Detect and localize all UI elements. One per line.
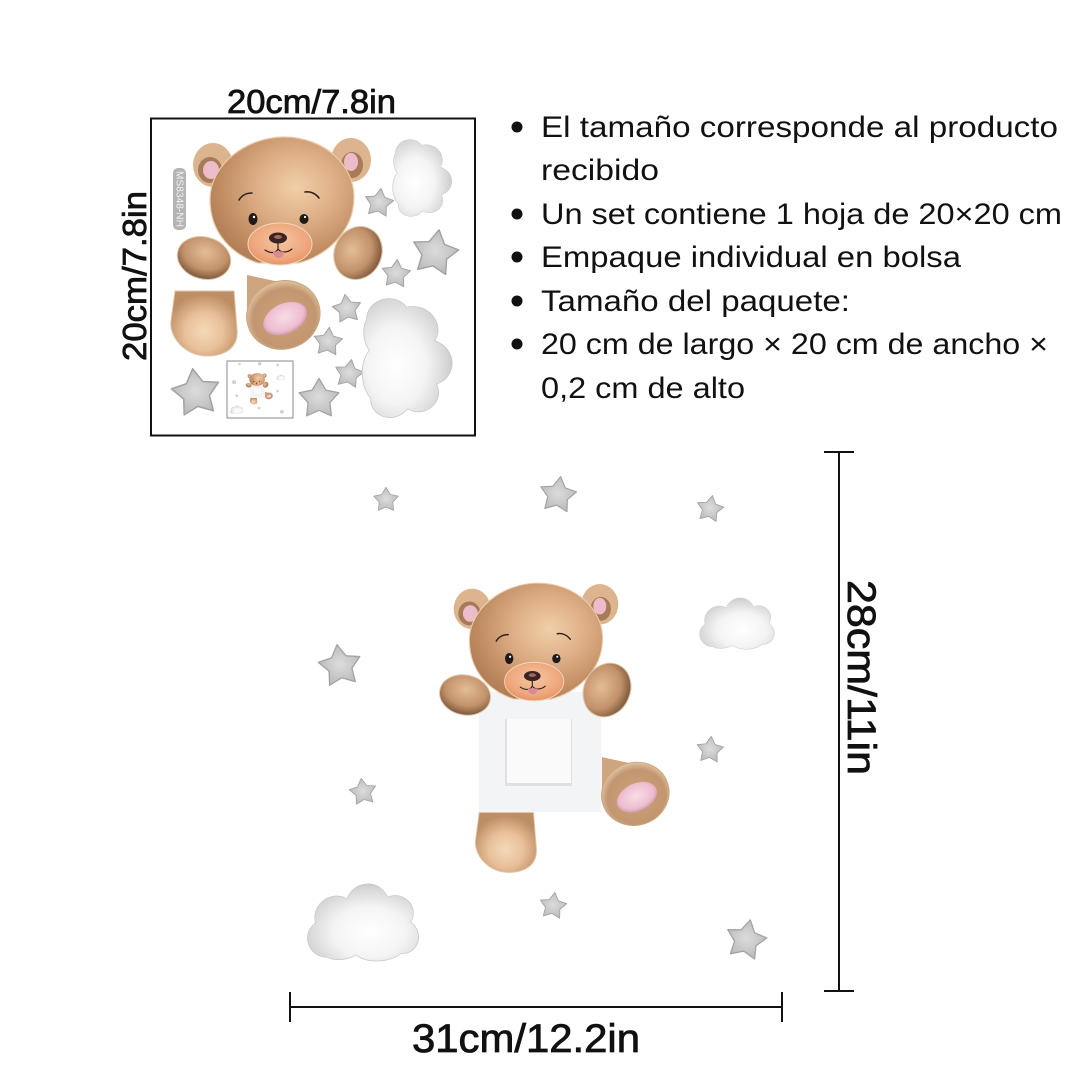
- sheet stars: [169, 186, 462, 416]
- bullet list: Tamaño del paquete:: [541, 285, 850, 318]
- bullet list: 0,2 cm de alto: [541, 372, 745, 405]
- bullet list: Un set contiene 1 hoja de 20×20 cm: [541, 198, 1062, 231]
- bullet list: Empaque individual en bolsa: [541, 241, 961, 274]
- width label: 31cm/12.2in: [412, 1017, 640, 1061]
- applied sticker scene: bear on light switch with stars and clouds: [307, 474, 774, 961]
- sheet size label: 20cm/7.8in: [227, 83, 396, 120]
- sheet serial tag: MS8348-NH: [174, 171, 184, 227]
- sticker sheet panel: [151, 118, 475, 436]
- sheet height label: 20cm/7.8in: [116, 191, 153, 361]
- bullet list: [512, 111, 1062, 405]
- height label: 28cm/11in: [839, 580, 883, 775]
- sheet bear parts: [171, 137, 391, 360]
- bullet list: El tamaño corresponde al producto: [541, 111, 1058, 144]
- bullet list: 20 cm de largo × 20 cm de ancho ×: [541, 328, 1048, 361]
- horizontal dimension line: [290, 992, 782, 1022]
- thumbnail preview: [227, 361, 293, 418]
- sheet clouds: [362, 140, 452, 417]
- vertical dimension line: [824, 452, 854, 991]
- bullet list: recibido: [541, 154, 659, 187]
